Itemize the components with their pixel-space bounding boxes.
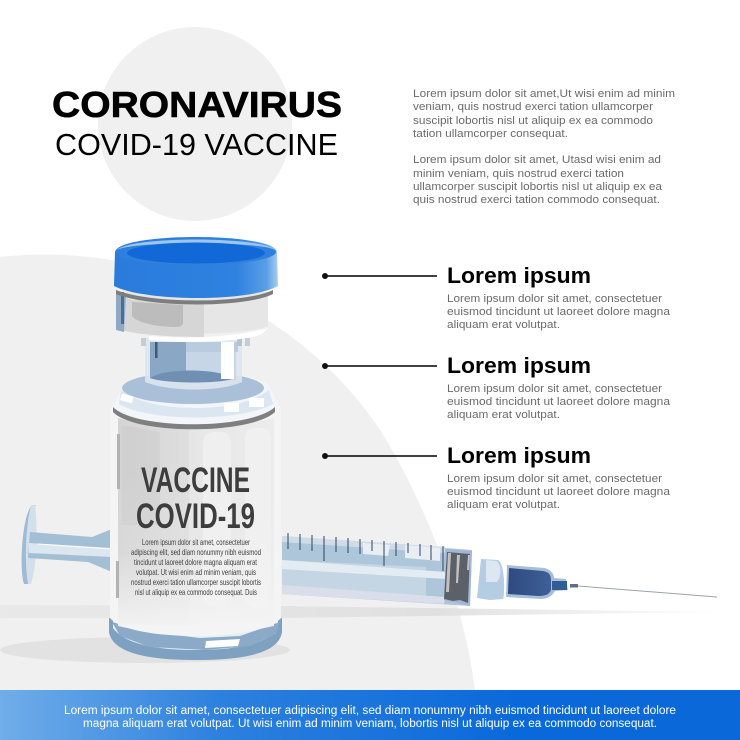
callout 1: aliquam erat volutpat. xyxy=(447,319,560,331)
title: COVID-19 VACCINE xyxy=(55,127,338,162)
label fade xyxy=(118,470,274,634)
intro text: veniam, quis nostrud exerci tation ullamcorper xyxy=(413,101,653,113)
rubber piston xyxy=(444,549,472,606)
callout 2: euismod tincidunt ut laoreet dolore magna xyxy=(447,396,671,408)
callout 2: Lorem ipsum dolor sit amet, consectetuer xyxy=(447,383,662,395)
vial label text: COVID-19 xyxy=(136,497,255,536)
vial xyxy=(109,237,282,660)
intro text: tation ullamcorper consequat. xyxy=(413,128,568,140)
vial shadow xyxy=(0,637,290,663)
title: CORONAVIRUS xyxy=(52,84,342,125)
vial label text: tincidunt ut laoreet dolore magna aliquam erat xyxy=(134,557,257,567)
callout 3: euismod tincidunt ut laoreet dolore magna xyxy=(447,486,671,498)
intro text: minim veniam, quis nostrud exerci tation xyxy=(413,168,624,180)
vial neck xyxy=(141,338,250,390)
callout 3 xyxy=(322,443,671,511)
intro text: Lorem ipsum dolor sit amet,Ut wisi enim ad minim xyxy=(413,88,675,100)
callout 3: aliquam erat volutpat. xyxy=(447,499,560,511)
callout 2: Lorem ipsum xyxy=(447,353,591,378)
needle xyxy=(570,584,578,588)
glass highlights xyxy=(203,428,271,608)
vial shoulder xyxy=(112,372,280,424)
callout 2: aliquam erat volutpat. xyxy=(447,409,560,421)
title xyxy=(52,84,342,162)
intro text: quis nostrud exerci tation commodo consequat. xyxy=(413,194,660,206)
callout 3: Lorem ipsum dolor sit amet, consectetuer xyxy=(447,473,662,485)
footer band: magna aliquam erat volutpat. Ut wisi enim ad minim veniam, lobortis nisl ut aliquip ex ea commodo consequat. xyxy=(83,718,657,730)
vial label text xyxy=(131,461,261,597)
vial label text: volutpat. Ut wisi enim ad minim veniam, quis xyxy=(136,567,256,577)
blue cap xyxy=(114,237,278,298)
cap collar xyxy=(116,292,268,342)
vial base xyxy=(109,618,282,660)
background shape xyxy=(0,254,475,690)
vial body xyxy=(110,402,281,636)
vial label text: Lorem ipsum dolor sit amet, consectetuer xyxy=(142,537,250,547)
needle hub xyxy=(506,565,568,599)
intro text: ullamcorper suscipit lobortis nisl ut aliquip ex ea xyxy=(413,181,663,193)
syringe shadow xyxy=(0,605,720,618)
vial label text: nisl ut aliquip ex ea commodo consequat. Duis xyxy=(135,587,257,597)
intro text: Lorem ipsum dolor sit amet, Utasd wisi enim ad xyxy=(413,154,661,166)
cap grey band xyxy=(116,290,273,304)
barrel xyxy=(282,536,472,606)
grey ring xyxy=(113,407,275,429)
footer band: Lorem ipsum dolor sit amet, consectetuer adipiscing elit, sed diam nonummy nibh euismod tincidunt ut laoreet dolore xyxy=(64,705,676,717)
callout 3: Lorem ipsum xyxy=(447,443,591,468)
plunger rod xyxy=(28,529,112,572)
needle hub collar xyxy=(477,559,504,600)
intro text xyxy=(413,88,675,206)
intro text: suscipit lobortis nisl ut aliquip ex ea commodo xyxy=(413,115,653,127)
syringe xyxy=(22,505,717,606)
vial label text: VACCINE xyxy=(141,461,250,500)
label area xyxy=(118,418,274,625)
callout 2 xyxy=(322,353,671,421)
callout 1: Lorem ipsum xyxy=(447,263,591,288)
callout 1 xyxy=(322,263,671,331)
vial label text: adipiscing elit, sed diam nonummy nibh euismod xyxy=(131,547,261,557)
title circle xyxy=(98,27,292,221)
barrel tick marks xyxy=(288,533,443,571)
callout 1: euismod tincidunt ut laoreet dolore magna xyxy=(447,306,671,318)
callout 1: Lorem ipsum dolor sit amet, consectetuer xyxy=(447,293,662,305)
footer band xyxy=(0,690,740,740)
plunger disc xyxy=(22,505,37,584)
vial label text: nostrud exerci tation ullamcorper suscipit lobortis xyxy=(131,577,261,587)
